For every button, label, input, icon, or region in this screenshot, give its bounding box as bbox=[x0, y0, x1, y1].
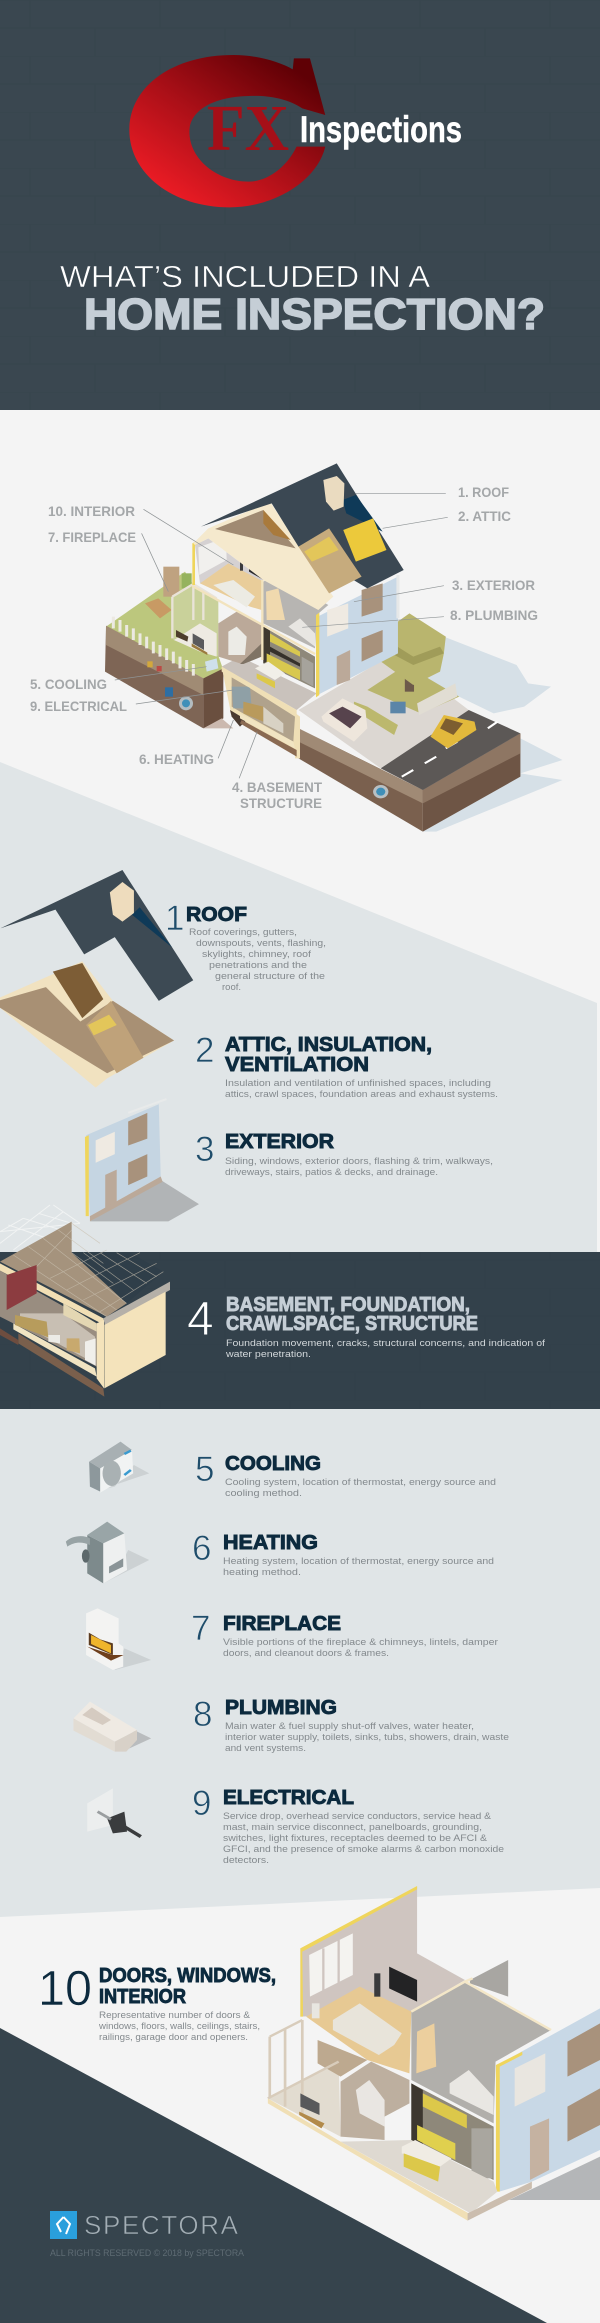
logo: Spectora: SPECTORA bbox=[84, 2210, 239, 2240]
section 9: electrical: GFCI, and the presence of smoke alarms & carbon monoxide bbox=[223, 1844, 504, 1855]
section 2: attic: Insulation and ventilation of unfinished spaces, including bbox=[225, 1078, 491, 1089]
section 5: cooling: Cooling system, location of thermostat, energy source and bbox=[225, 1477, 496, 1488]
section 8: plumbing: PLUMBING bbox=[225, 1697, 337, 1719]
section 6: heating: heating method. bbox=[223, 1567, 301, 1578]
logo: FX Inspections bbox=[129, 55, 462, 207]
house labels bbox=[30, 484, 538, 811]
bathroom bbox=[263, 575, 328, 648]
title bbox=[60, 259, 545, 339]
panel: header background bbox=[0, 0, 600, 410]
section 4: basement: Foundation movement, cracks, structural concerns, and indication of bbox=[226, 1338, 545, 1349]
section 9: electrical: switches, light fixtures, receptacles deemed to be AFCI & bbox=[223, 1833, 488, 1844]
house labels: STRUCTURE bbox=[240, 795, 322, 811]
section 10: doors windows interior: windows, floors, walls, ceilings, stairs, bbox=[98, 2021, 260, 2032]
section 4: basement: 4 bbox=[187, 1293, 214, 1346]
house labels: 10. INTERIOR bbox=[48, 503, 135, 519]
section 1: roof: penetrations and the bbox=[209, 960, 307, 971]
house labels: 8. PLUMBING bbox=[450, 607, 538, 623]
section 10: doors windows interior bbox=[38, 1962, 276, 2043]
panel: footer dark triangle bbox=[0, 2028, 547, 2323]
section 7: fireplace: 7 bbox=[191, 1609, 210, 1648]
house labels: 4. BASEMENT bbox=[232, 779, 322, 795]
icon: fireplace bbox=[86, 1608, 151, 1670]
icon: roof illustration bbox=[0, 870, 193, 1001]
house labels: 9. ELECTRICAL bbox=[30, 698, 127, 714]
section 5: cooling: cooling method. bbox=[225, 1488, 302, 1499]
section 1: roof: 1 bbox=[165, 899, 184, 938]
section 3: exterior: Siding, windows, exterior doors, flashing & trim, walkways, bbox=[225, 1156, 493, 1167]
section 5: cooling: COOLING bbox=[225, 1453, 321, 1475]
panel: basement band bbox=[0, 1252, 600, 1409]
section 1: roof: skylights, chimney, roof bbox=[202, 949, 311, 960]
title: HOME INSPECTION? bbox=[84, 290, 545, 339]
house labels: 1. ROOF bbox=[458, 484, 509, 500]
section 3: exterior: driveways, stairs, patios & decks, and drainage. bbox=[225, 1167, 438, 1178]
open living room bbox=[172, 583, 218, 657]
house labels: 5. COOLING bbox=[30, 676, 107, 692]
section 6: heating: HEATING bbox=[223, 1532, 318, 1554]
section 1: roof: ROOF bbox=[186, 904, 247, 926]
section 4: basement: water penetration. bbox=[225, 1349, 311, 1360]
section 8: plumbing: 8 bbox=[193, 1695, 212, 1734]
gable bbox=[193, 502, 333, 610]
upper living room bbox=[195, 538, 263, 592]
section 8: plumbing: Main water & fuel supply shut-off valves, water heater, bbox=[225, 1721, 474, 1732]
icon: electrical plug bbox=[87, 1788, 141, 1837]
illustration: cutaway house bbox=[105, 463, 562, 832]
section 6: heating bbox=[192, 1529, 494, 1578]
section 8: plumbing: interior water supply, toilets, sinks, tubs, showers, drain, waste bbox=[225, 1732, 509, 1743]
section 5: cooling bbox=[195, 1450, 496, 1499]
section 10: doors windows interior: Representative number of doors & bbox=[99, 2010, 251, 2021]
title: WHAT’S INCLUDED IN A bbox=[60, 259, 430, 294]
section 4: basement: BASEMENT, FOUNDATION, bbox=[226, 1294, 470, 1316]
section 10: doors windows interior: DOORS, WINDOWS, bbox=[99, 1965, 276, 1987]
section 5: cooling: 5 bbox=[195, 1450, 214, 1489]
section 2: attic: ATTIC, INSULATION, bbox=[225, 1034, 432, 1056]
house labels: 7. FIREPLACE bbox=[48, 529, 136, 545]
section 9: electrical: 9 bbox=[192, 1784, 211, 1823]
illustration: interior cutaway bbox=[268, 1886, 600, 2221]
hall bbox=[218, 612, 262, 663]
section 2: attic: attics, crawl spaces, foundation areas and exhaust systems. bbox=[225, 1089, 498, 1100]
section 1: roof: downspouts, vents, flashing, bbox=[196, 938, 326, 949]
icon: heating furnace bbox=[66, 1522, 149, 1583]
section 3: exterior: 3 bbox=[195, 1130, 214, 1169]
section 9: electrical: ELECTRICAL bbox=[223, 1787, 354, 1809]
section 1: roof: Roof coverings, gutters, bbox=[189, 927, 297, 938]
icon: basement illustration bbox=[0, 1205, 170, 1397]
section 4: basement bbox=[187, 1293, 545, 1360]
section 1: roof: general structure of the bbox=[215, 971, 325, 982]
section 2: attic: VENTILATION bbox=[225, 1054, 369, 1076]
section 4: basement: CRAWLSPACE, STRUCTURE bbox=[226, 1313, 478, 1335]
icon: cooling unit bbox=[89, 1442, 149, 1493]
basement bbox=[222, 663, 300, 758]
section 6: heating: Heating system, location of thermostat, energy source and bbox=[223, 1556, 494, 1567]
section 2: attic bbox=[195, 1031, 498, 1100]
logo: FX Inspections: Inspections bbox=[300, 109, 462, 150]
section 9: electrical: detectors. bbox=[223, 1855, 269, 1866]
section 8: plumbing: and vent systems. bbox=[225, 1743, 306, 1754]
section 7: fireplace: Visible portions of the fireplace & chimneys, lintels, damper bbox=[223, 1637, 498, 1648]
house labels: 3. EXTERIOR bbox=[452, 577, 535, 593]
panel: grey content background bbox=[0, 762, 600, 1917]
terrace furniture bbox=[145, 598, 172, 618]
section 1: roof bbox=[165, 899, 326, 993]
icon: bathtub bbox=[73, 1702, 151, 1752]
kitchen bbox=[263, 627, 315, 688]
section 9: electrical bbox=[192, 1784, 504, 1866]
section 6: heating: 6 bbox=[192, 1529, 211, 1568]
section 9: electrical: mast, main service disconnect, panelboards, grounding, bbox=[223, 1822, 482, 1833]
section 3: exterior: EXTERIOR bbox=[225, 1131, 335, 1153]
footer copyright: ALL RIGHTS RESERVED © 2018 by SPECTORA bbox=[50, 2248, 245, 2259]
section 9: electrical: Service drop, overhead service conductors, service head & bbox=[223, 1811, 492, 1822]
section 10: doors windows interior: railings, garage door and openers. bbox=[99, 2032, 248, 2043]
section 1: roof: roof. bbox=[222, 982, 241, 993]
section 10: doors windows interior: INTERIOR bbox=[99, 1986, 187, 2008]
section 3: exterior bbox=[195, 1130, 493, 1178]
section 7: fireplace bbox=[191, 1609, 498, 1659]
icon: exterior wall illustration bbox=[85, 1099, 199, 1221]
house labels: 6. HEATING bbox=[139, 751, 214, 767]
section 2: attic: 2 bbox=[195, 1031, 214, 1070]
section 7: fireplace: FIREPLACE bbox=[223, 1613, 341, 1635]
section 10: doors windows interior: 10 bbox=[38, 1962, 92, 2016]
icon: attic illustration bbox=[0, 961, 174, 1088]
house labels: 2. ATTIC bbox=[458, 508, 511, 524]
section 7: fireplace: doors, and cleanout doors & frames. bbox=[223, 1648, 389, 1659]
logo: FX Inspections: FX bbox=[207, 92, 289, 165]
section 8: plumbing bbox=[193, 1695, 509, 1754]
